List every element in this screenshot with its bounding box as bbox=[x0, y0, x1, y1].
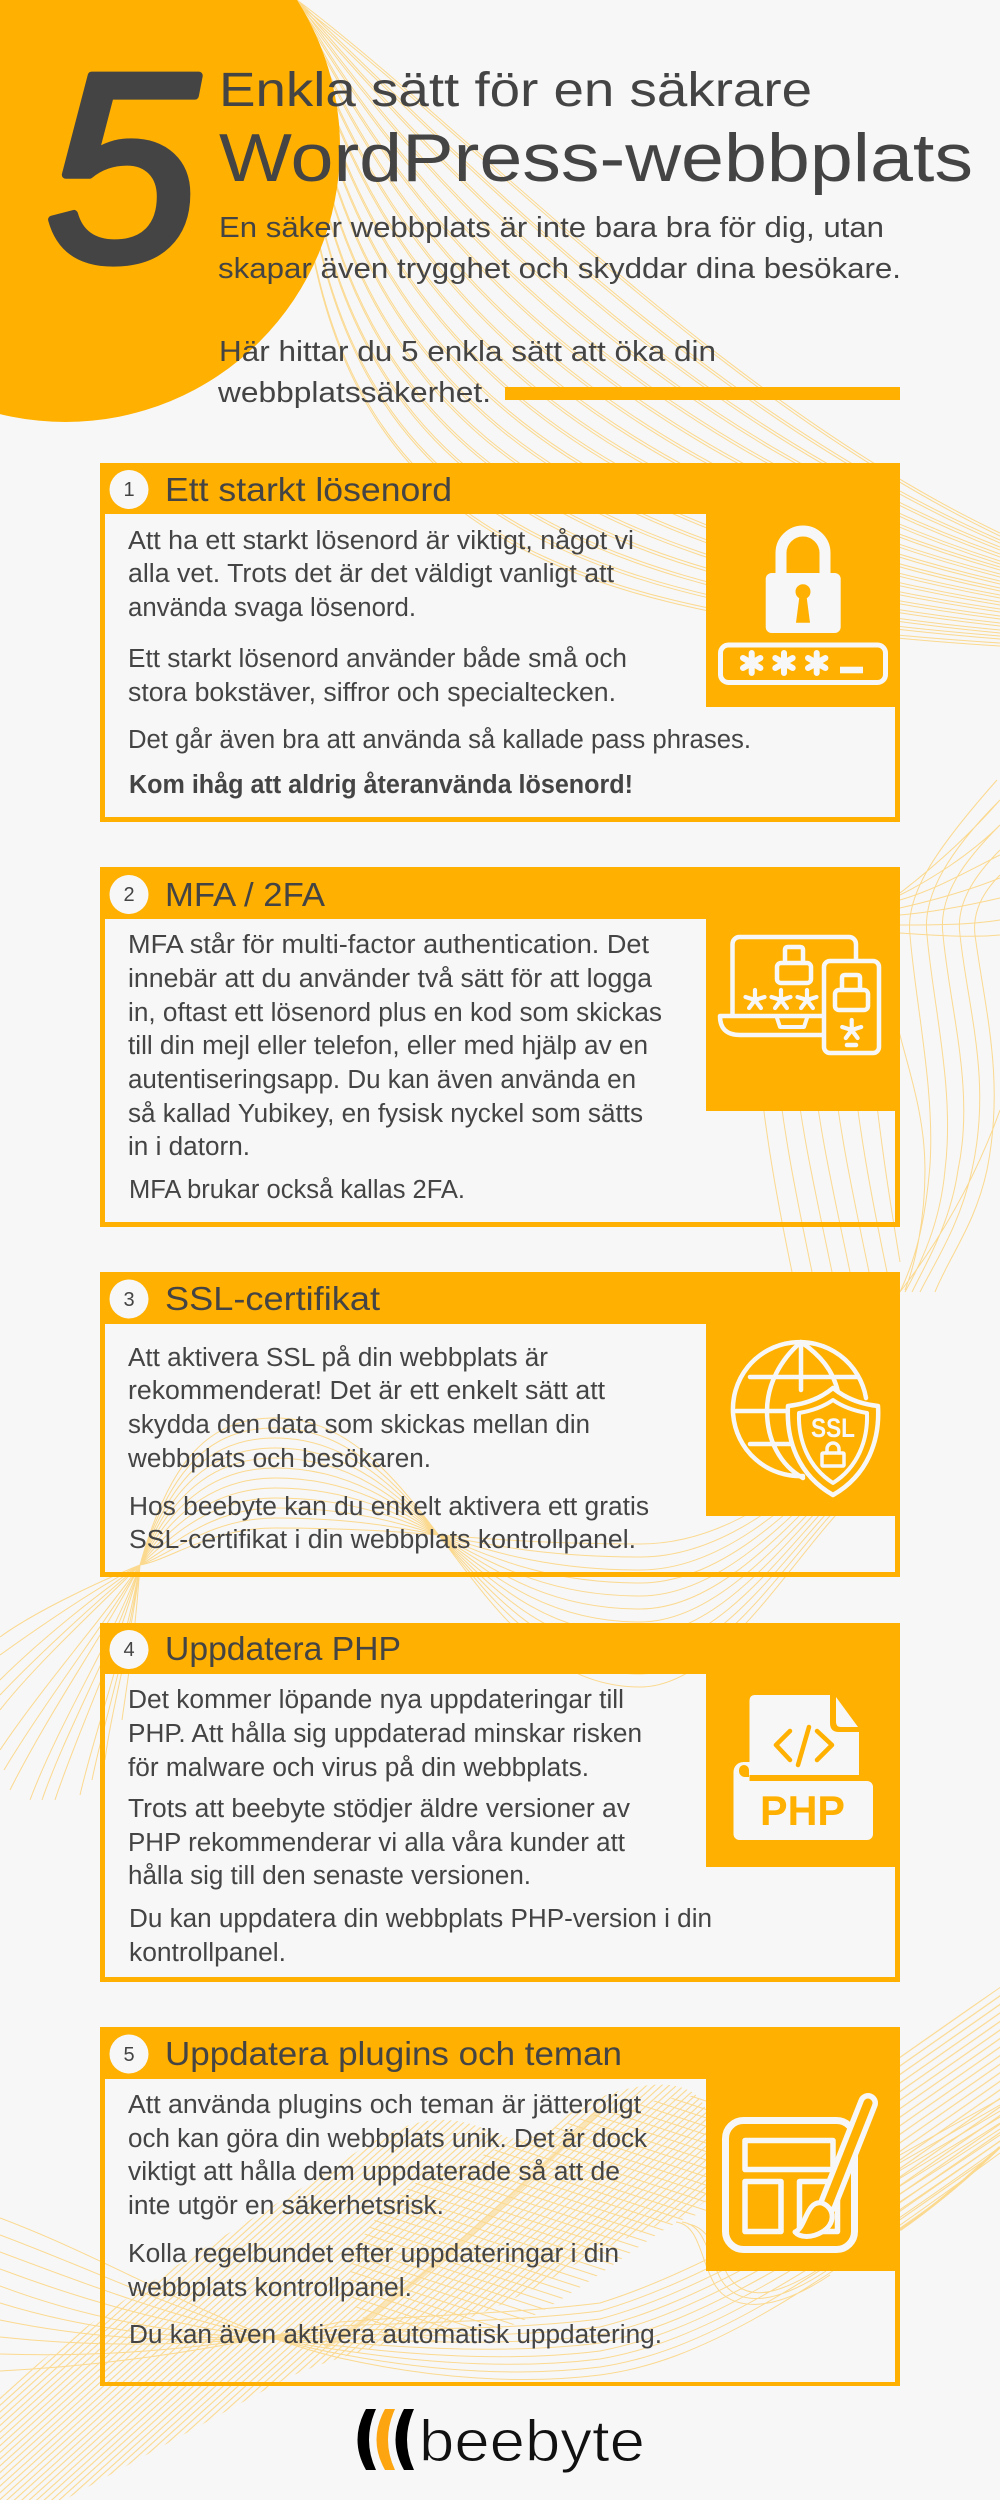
body text: skydda den data som skickas mellan din bbox=[128, 1411, 590, 1439]
intro text: Här hittar du 5 enkla sätt att öka din bbox=[219, 336, 716, 368]
icon: globe with SSL shield: SSL bbox=[811, 1413, 855, 1443]
body text bbox=[127, 1344, 649, 1554]
panel frame bbox=[100, 463, 900, 822]
panel: 5 Uppdatera plugins och teman bbox=[100, 2027, 900, 2386]
accent bar bbox=[505, 387, 900, 400]
icon: laptop and phone login bbox=[720, 937, 879, 1053]
body text bbox=[127, 2091, 662, 2349]
background wave: bottom ribbon bbox=[0, 1987, 1000, 2500]
body text: Kolla regelbundet efter uppdateringar i din bbox=[128, 2240, 619, 2268]
panel frame bbox=[100, 867, 900, 1227]
body text: stora bokstäver, siffror och specialtecken. bbox=[128, 679, 616, 707]
panel frame bbox=[100, 1272, 900, 1577]
big number 5: 5 bbox=[46, 17, 200, 317]
intro text: skapar även trygghet och skyddar dina besökare. bbox=[218, 253, 901, 285]
number badge 4: 4 bbox=[123, 1639, 135, 1661]
intro text: En säker webbplats är inte bara bra för dig, utan bbox=[219, 212, 884, 244]
body text: till din mejl eller telefon, eller med hjälp av en bbox=[128, 1032, 648, 1060]
body text: Du kan även aktivera automatisk uppdatering. bbox=[129, 2321, 662, 2349]
body text: in, oftast ett lösenord plus en kod som skickas bbox=[128, 999, 662, 1027]
icon: layout and paintbrush bbox=[726, 2103, 868, 2250]
body text: rekommenderat! Det är ett enkelt sätt att bbox=[128, 1377, 605, 1405]
body text: webbplats och besökaren. bbox=[127, 1445, 431, 1473]
heading: Uppdatera plugins och teman bbox=[165, 2035, 622, 2072]
icon: globe with SSL shield bbox=[733, 1342, 878, 1495]
icon: PHP file bbox=[734, 1695, 873, 1840]
heading: SSL-certifikat bbox=[165, 1280, 380, 1317]
icon: padlock and password bbox=[720, 531, 886, 682]
logo wordmark: beebyte bbox=[419, 2409, 645, 2474]
body text: Du kan uppdatera din webbplats PHP-version i din bbox=[129, 1905, 712, 1933]
body text: Det kommer löpande nya uppdateringar till bbox=[128, 1686, 624, 1714]
body text: MFA brukar också kallas 2FA. bbox=[129, 1176, 465, 1204]
body text bbox=[128, 931, 662, 1204]
background wave: top fan bbox=[296, 0, 1000, 646]
intro text bbox=[217, 212, 901, 409]
body text: Det går även bra att använda så kallade pass phrases. bbox=[128, 726, 751, 754]
decorative big circle bbox=[0, 0, 340, 422]
title bbox=[219, 64, 973, 196]
panel frame bbox=[100, 2027, 900, 2386]
body text: för malware och virus på din webbplats. bbox=[128, 1754, 589, 1782]
panel: 1 Ett starkt lösenord bbox=[100, 463, 900, 822]
body text: Trots att beebyte stödjer äldre versioner av bbox=[128, 1795, 630, 1823]
panel: 2 MFA / 2FA bbox=[100, 867, 900, 1227]
number badge 3 bbox=[110, 1280, 148, 1318]
body text: så kallad Yubikey, en fysisk nyckel som sätts bbox=[128, 1100, 643, 1128]
number badge 1: 1 bbox=[123, 479, 135, 501]
panel: 3 SSL-certifikat bbox=[100, 1272, 900, 1577]
body text: hålla sig till den senaste versionen. bbox=[128, 1862, 531, 1890]
body text: Hos beebyte kan du enkelt aktivera ett gratis bbox=[129, 1493, 649, 1521]
body text: PHP. Att hålla sig uppdaterad minskar risken bbox=[128, 1720, 642, 1748]
body text: alla vet. Trots det är det väldigt vanligt att bbox=[128, 560, 614, 588]
heading: MFA / 2FA bbox=[165, 876, 325, 913]
heading: Uppdatera PHP bbox=[165, 1630, 401, 1667]
body text: använda svaga lösenord. bbox=[128, 594, 416, 622]
background wave: right side bbox=[758, 780, 1000, 1292]
icon: PHP file: PHP bbox=[760, 1787, 845, 1834]
number badge 1 bbox=[110, 470, 148, 509]
body text: PHP rekommenderar vi alla våra kunder att bbox=[128, 1829, 625, 1857]
body text: Kom ihåg att aldrig återanvända lösenord! bbox=[129, 771, 633, 799]
number badge 3: 3 bbox=[123, 1289, 135, 1311]
logo: beebyte bbox=[358, 2409, 645, 2474]
body text: innebär att du använder två sätt för att logga bbox=[128, 965, 653, 993]
body text: webbplats kontrollpanel. bbox=[127, 2274, 412, 2302]
logo mark bbox=[358, 2409, 414, 2470]
number badge 2: 2 bbox=[123, 884, 135, 906]
body text: SSL-certifikat i din webbplats kontrollpanel. bbox=[129, 1526, 636, 1554]
body text: autentiseringsapp. Du kan även använda en bbox=[128, 1066, 636, 1094]
body text: Ett starkt lösenord använder både små och bbox=[128, 645, 627, 673]
body text: Att använda plugins och teman är jätteroligt bbox=[128, 2091, 641, 2119]
body text: Att aktivera SSL på din webbplats är bbox=[128, 1344, 549, 1372]
body text: kontrollpanel. bbox=[129, 1939, 286, 1967]
number badge 5 bbox=[110, 2034, 148, 2074]
body text: in i datorn. bbox=[128, 1133, 250, 1161]
background wave: middle left bbox=[0, 1418, 850, 1800]
panel frame bbox=[100, 1623, 900, 1982]
body text: och kan göra din webbplats unik. Det är dock bbox=[128, 2125, 647, 2153]
number badge 2 bbox=[110, 875, 148, 914]
number badge 5: 5 bbox=[123, 2044, 135, 2066]
number badge 4 bbox=[110, 1630, 148, 1669]
body text: Att ha ett starkt lösenord är viktigt, något vi bbox=[128, 527, 634, 555]
title: Enkla sätt för en säkrare bbox=[219, 64, 812, 117]
heading: Ett starkt lösenord bbox=[165, 471, 452, 508]
body text: inte utgör en säkerhetsrisk. bbox=[128, 2192, 444, 2220]
body text: viktigt att hålla dem uppdaterade så att de bbox=[128, 2158, 620, 2186]
panel: 4 Uppdatera PHP bbox=[100, 1623, 900, 1982]
body text bbox=[128, 527, 751, 799]
title: WordPress-webbplats bbox=[219, 120, 973, 196]
intro text: webbplatssäkerhet. bbox=[217, 377, 491, 409]
body text bbox=[128, 1686, 712, 1967]
body text: MFA står för multi-factor authentication. Det bbox=[128, 931, 649, 959]
